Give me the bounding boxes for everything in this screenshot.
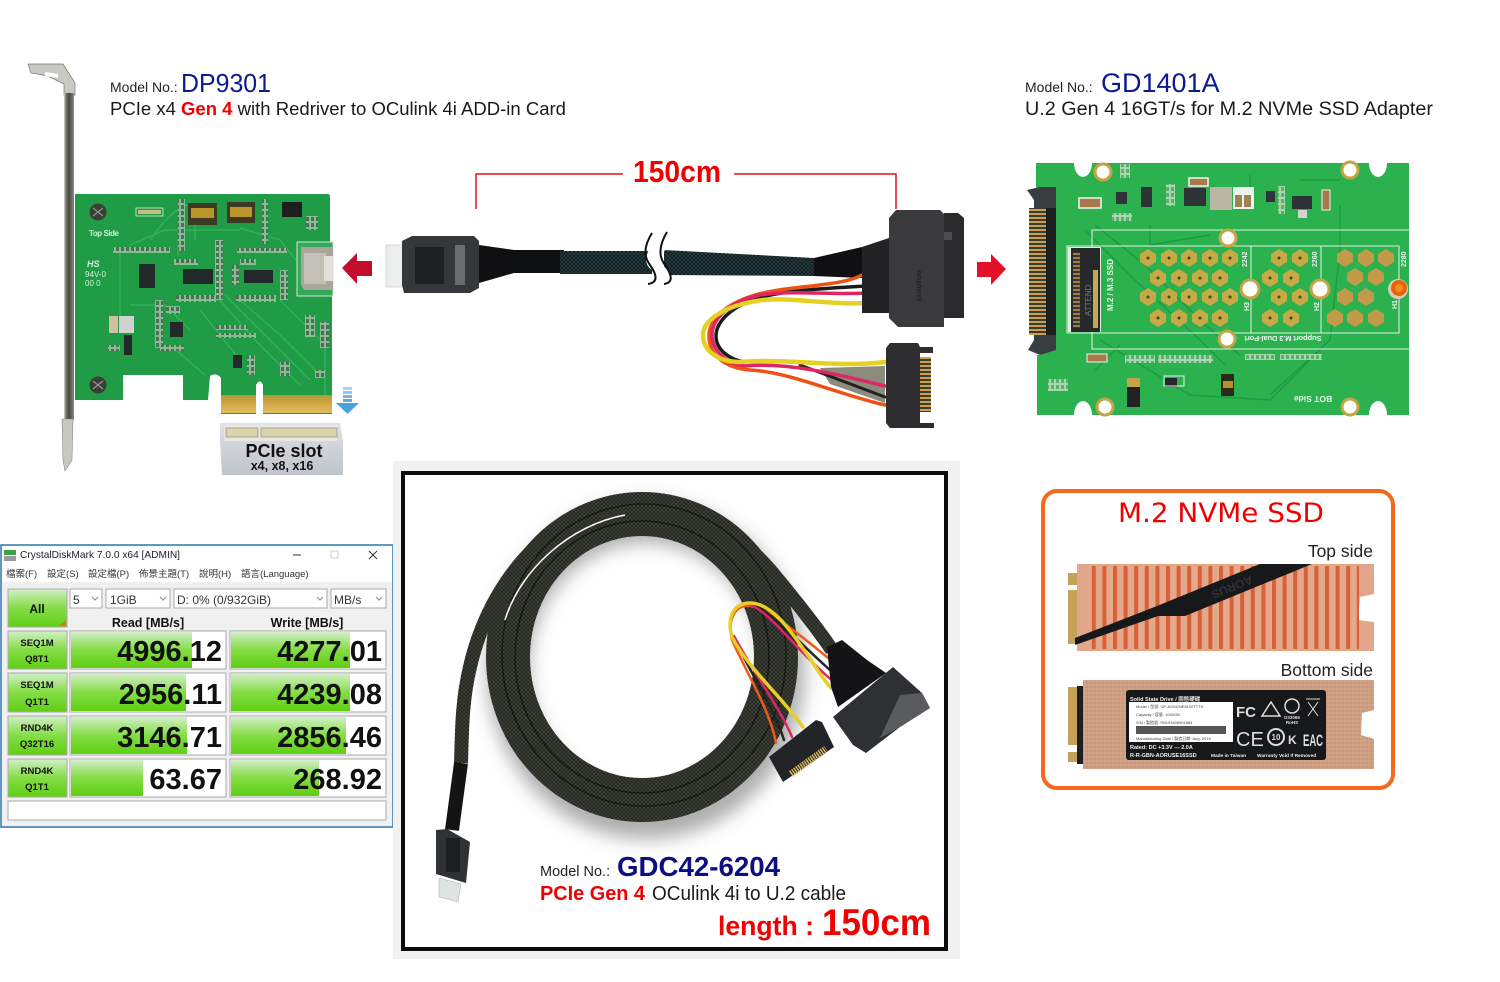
model text: OCulink 4i to U.2 cable [652, 883, 846, 905]
title bar: 語言(Language) [241, 568, 309, 580]
metal bracket [28, 64, 75, 471]
U.2 adapter board GD1401A [1027, 162, 1409, 415]
U.2 connector [862, 210, 964, 327]
row: RND4K Q1T1: RND4K [21, 766, 53, 777]
product sticker: FC [1236, 704, 1256, 721]
PCIe slot illustration [220, 423, 343, 475]
row: SEQ1M Q8T1: SEQ1M [20, 638, 54, 649]
label: top side: Top side [1308, 541, 1373, 561]
adapter silkscreen text [1106, 251, 1408, 404]
inductor [109, 316, 134, 333]
circuit board [75, 194, 332, 414]
title bar: CrystalDiskMark 7.0.0 x64 [ADMIN] [20, 549, 180, 561]
heading: DP9301 model [110, 68, 566, 119]
U.2 edge connector [1027, 187, 1056, 355]
PCIe slot illustration: PCIe slot [245, 441, 323, 461]
model text [540, 851, 931, 943]
model text: 150cm [822, 902, 931, 943]
row: RND4K Q32T16 [8, 716, 386, 755]
All button: All [29, 602, 45, 616]
PCIe slot illustration: x4, x8, x16 [251, 459, 313, 473]
adapter silkscreen text: Support M.3 Dual-Port [1244, 334, 1322, 343]
OCulink plug [386, 236, 514, 293]
header and pad rows [108, 199, 329, 378]
row: RND4K Q1T1: 268.92 [293, 764, 382, 796]
OCulink plug [436, 829, 470, 902]
coiled braided cable [452, 504, 832, 830]
product sticker: S/N / 製造號: SN193408901884 [1136, 719, 1193, 725]
length dimension: 150cm [476, 154, 896, 209]
title bar: 檔案(F) [6, 568, 37, 580]
column headers [112, 616, 343, 630]
product sticker: Capacity / 容量: 1000GB [1136, 711, 1180, 717]
U.2 connector: Amphenol [915, 270, 922, 302]
dropdown selectors [70, 589, 386, 608]
silkscreen text: HS [87, 259, 100, 269]
OCulink socket [297, 242, 333, 296]
adapter silkscreen text: 2242 [1242, 251, 1249, 267]
row: RND4K Q1T1 [8, 759, 386, 797]
title bar [2, 546, 392, 582]
braided cable [514, 247, 862, 278]
product sticker [1126, 690, 1326, 760]
hex pad drill holes [1146, 256, 1302, 320]
DIP switches and jumper [188, 202, 302, 225]
model text: Model No.: [540, 864, 610, 880]
hexagonal gold pads [1140, 249, 1394, 327]
panel: cable GDC42-6204 [393, 461, 960, 959]
chips [124, 264, 273, 368]
row: SEQ1M Q8T1 [8, 631, 386, 669]
SATA connector [769, 720, 834, 782]
silkscreen text: 94V-0 [85, 270, 106, 279]
product sticker: Manufacturing Date / 製造日期: Aug. 2019 [1136, 735, 1211, 741]
arrow: cable to adapter [977, 254, 1006, 285]
product sticker: RoHS [1286, 720, 1298, 725]
SSD bottom side [1068, 680, 1374, 769]
row: SEQ1M Q1T1: 4239.08 [277, 679, 382, 711]
arrow: cable to card [342, 253, 372, 284]
heading: GD1401A model: Model No.: [1025, 79, 1093, 95]
silkscreen text: Top Side [89, 229, 120, 238]
product sticker: Rated: DC +3.3V --- 2.0A [1130, 745, 1193, 751]
heading: DP9301 model: DP9301 [181, 68, 271, 98]
title bar: 說明(H) [199, 568, 231, 580]
row: SEQ1M Q1T1: SEQ1M [20, 680, 54, 691]
title bar: 佈景主題(T) [139, 568, 189, 580]
product sticker: K [1288, 733, 1297, 747]
product sticker: Model / 型號: GP-AGM2NE6100TTTD [1136, 703, 1204, 709]
SSD top side: AORUS [1209, 572, 1255, 602]
row: RND4K Q32T16: RND4K [21, 723, 53, 734]
dropdown selectors: MB/s [334, 593, 361, 607]
row: SEQ1M Q1T1 [8, 673, 386, 712]
silkscreen text: 00 0 [85, 279, 101, 288]
heading: DP9301 model: Model No.: [110, 79, 178, 95]
adapter silkscreen text: 2280 [1401, 251, 1408, 267]
power wires [730, 603, 847, 743]
adapter silkscreen text: M.2 / M.3 SSD [1106, 259, 1115, 311]
cable photo: OCulink to U.2 [386, 210, 964, 428]
row: SEQ1M Q8T1: 4277.01 [277, 636, 382, 668]
panel title: M.2 NVMe SSD [1118, 498, 1324, 529]
dropdown selectors: 5 [73, 593, 80, 607]
heading: GD1401A model: U.2 Gen 4 16GT/s for M.2 NVMe SSD Adapter [1025, 99, 1434, 120]
silkscreen text [85, 229, 120, 288]
product sticker: Solid State Drive / 固態硬碟 [1130, 695, 1201, 703]
title bar: 設定檔(P) [88, 568, 129, 580]
PCIe add-in card DP9301 [28, 64, 359, 475]
M.2 socket [1068, 247, 1101, 332]
SATA power connector [886, 343, 934, 428]
product sticker: CE [1236, 729, 1264, 751]
model text: GDC42-6204 [617, 851, 780, 882]
model text: PCIe Gen 4 [540, 883, 646, 905]
product sticker: R-R-GBN-AORUSE16SSD [1130, 753, 1197, 759]
orange standoff [1388, 279, 1408, 299]
dropdown selectors: 1GiB [110, 593, 137, 607]
heading: DP9301 model: PCIe x4 Gen 4 with Redriver to OCulink 4i ADD-in Card [110, 99, 566, 119]
white silkscreen outlines [1067, 230, 1409, 349]
title bar: 設定(S) [47, 568, 79, 580]
cable break mark [645, 232, 673, 300]
row: RND4K Q1T1: Q1T1 [25, 782, 50, 793]
lower connectors and pads [1048, 354, 1322, 407]
power section components [1079, 164, 1330, 221]
power wires [703, 275, 885, 405]
mounting holes [1095, 162, 1358, 415]
board traces [120, 205, 325, 395]
gold fingers [221, 395, 332, 413]
adapter silkscreen text: H2 [1314, 302, 1321, 311]
adapter traces [1085, 175, 1340, 400]
row: SEQ1M Q1T1: 2956.11 [119, 679, 222, 711]
adapter silkscreen text: H3 [1244, 302, 1251, 311]
adapter silkscreen text: BOT Side [1294, 394, 1332, 404]
arrow: card to slot [336, 387, 359, 414]
adapter board [1036, 163, 1409, 415]
row: RND4K Q32T16: Q32T16 [20, 739, 54, 750]
adapter silkscreen text: 2260 [1312, 251, 1319, 267]
column headers: Read [MB/s] [112, 616, 184, 630]
CrystalDiskMark window [1, 545, 393, 827]
SSD top side [1068, 564, 1374, 651]
product sticker: Warranty Void If Removed [1257, 753, 1316, 759]
model text: length : [718, 911, 814, 941]
heading: GD1401A model: GD1401A [1101, 68, 1220, 98]
M.2 socket: ATTEND [1084, 284, 1093, 316]
mounting screws [90, 204, 106, 394]
heading: GD1401A model [1025, 68, 1434, 120]
label: bottom side: Bottom side [1281, 660, 1373, 680]
product sticker: EAC [1303, 731, 1323, 750]
row: RND4K Q32T16: 2856.46 [277, 722, 382, 754]
row: SEQ1M Q8T1: Q8T1 [25, 654, 50, 665]
product sticker: 10 [1272, 733, 1281, 742]
comment box [8, 801, 386, 820]
dropdown selectors: D: 0% (0/932GiB) [177, 593, 271, 607]
product sticker: D33066 [1284, 715, 1300, 720]
length dimension: 150cm: 150cm [633, 154, 721, 189]
product sticker: Made in Taiwan [1211, 753, 1246, 759]
column headers: Write [MB/s] [271, 616, 343, 630]
panel: M.2 NVMe SSD [1043, 491, 1393, 788]
row: RND4K Q1T1: 63.67 [149, 764, 222, 796]
row: SEQ1M Q8T1: 4996.12 [117, 636, 222, 668]
row: SEQ1M Q1T1: Q1T1 [25, 697, 50, 708]
adapter silkscreen text: H1 [1392, 300, 1399, 309]
U.2 connector [827, 640, 930, 753]
row: RND4K Q32T16: 3146.71 [117, 722, 222, 754]
All button [8, 589, 67, 627]
